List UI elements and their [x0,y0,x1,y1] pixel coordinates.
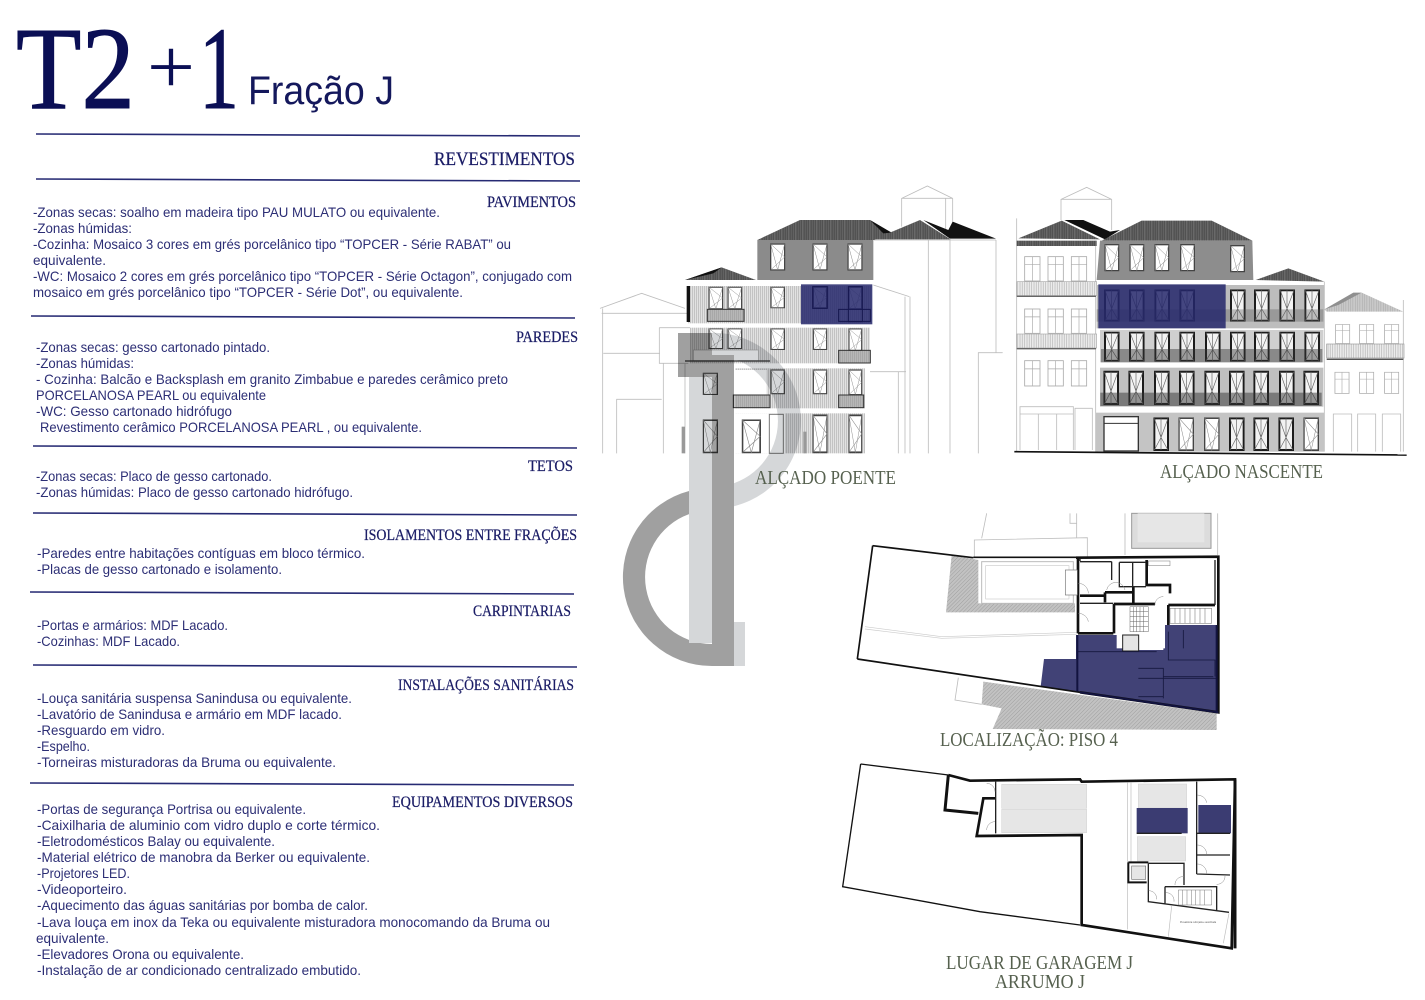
floor plan: garagem e arrumo [843,764,1235,948]
text block: tetos: TETOS [528,458,573,475]
text block: isolamentos entre frações [33,513,577,577]
text block: equipamentos diversos: -Aquecimento das águas sanitárias por bomba de calor. [37,897,368,913]
right building [1327,325,1404,452]
text block: instalações sanitárias: -Resguardo em vidro. [37,722,165,738]
title [16,3,394,134]
elevation drawing: alçado poente [600,186,1003,453]
text block: pavimentos: -Cozinha: Mosaico 3 cores em grés porcelânico tipo “TOPCER - Série RABAT” ou [33,236,511,252]
text block: isolamentos entre frações: -Placas de gesso cartonado e isolamento. [37,561,282,577]
text block: paredes: -Zonas secas: gesso cartonado pintado. [36,339,270,355]
text block: equipamentos diversos: -Projetores LED. [37,865,130,881]
railings [707,309,870,408]
text block: paredes: - Cozinha: Balcão e Backsplash em granito Zimbabue e paredes cerâmico preto [36,371,508,387]
text block: equipamentos diversos: equivalente. [36,930,109,946]
text block: equipamentos diversos: -Lava louça em inox da Teka ou equivalente misturadora monocomando da Bruma ou [37,914,550,930]
text block: carpintarias: -Cozinhas: MDF Lacado. [37,633,180,649]
text block: equipamentos diversos: -Material elétrico de manobra da Berker ou equivalente. [37,849,370,865]
text block: paredes: PORCELANOSA PEARL ou equivalente [36,387,266,403]
text block: tetos [33,446,577,500]
text block: equipamentos diversos [30,783,574,978]
text block: paredes: PAREDES [516,329,578,346]
text block: instalações sanitárias: INSTALAÇÕES SANITÁRIAS [398,677,574,694]
text block: pavimentos: -Zonas secas: soalho em madeira tipo PAU MULATO ou equivalente. [33,204,440,220]
text block: equipamentos diversos: EQUIPAMENTOS DIVERSOS [392,794,573,811]
icon: upper roofs [685,220,996,280]
text block: equipamentos diversos: -Caixilharia de aluminio com vidro duplo e corte térmico. [37,817,380,833]
text block: equipamentos diversos: -Elevadores Orona ou equivalente. [37,946,244,962]
floor plan: garagem e arrumo: Prevalência reforçada e autorizada [1180,921,1217,924]
parking bays [1002,784,1187,861]
text block: instalações sanitárias: -Espelho. [37,738,90,754]
text block: equipamentos diversos: -Eletrodomésticos Balay ou equivalente. [37,833,275,849]
highlight: fração J [1041,625,1218,712]
text block: pavimentos [33,194,576,300]
text block: carpintarias: -Portas e armários: MDF Lacado. [37,617,228,633]
left building [1017,257,1097,450]
text block: isolamentos entre frações: ISOLAMENTOS ENTRE FRAÇÕES [364,527,577,544]
caption: arrumo: ARRUMO J [995,971,1085,993]
highlight: lugar J and arrumo J [1137,805,1231,833]
text block: tetos: -Zonas secas: Placo de gesso cartonado. [36,468,272,484]
text block: isolamentos entre frações: -Paredes entre habitações contíguas em bloco térmico. [37,545,365,561]
watermark logo [623,333,801,666]
caption: lugar de garagem: LUGAR DE GARAGEM J [946,952,1133,974]
text block: paredes: -WC: Gesso cartonado hidrófugo [36,403,232,419]
caption: localização: LOCALIZAÇÃO: PISO 4 [940,727,1118,751]
text block: pavimentos: equivalente. [33,252,106,268]
text block: instalações sanitárias: -Louça sanitária suspensa Sanindusa ou equivalente. [37,690,352,706]
text block: pavimentos: mosaico em grés porcelânico tipo “TOPCER - Série Dot”, ou equivalente. [33,284,463,300]
text block: tetos: -Zonas húmidas: Placo de gesso cartonado hidrófugo. [36,484,353,500]
section heading: revestimentos: REVESTIMENTOS [434,149,575,170]
text block: equipamentos diversos: -Portas de segurança Portrisa ou equivalente. [37,801,306,817]
text block: pavimentos: -Zonas húmidas: [33,220,132,236]
hatched terrace [946,555,1075,612]
floor plan: piso 4 [857,513,1218,730]
main body [1096,285,1324,452]
text block: paredes: -Zonas húmidas: [36,355,134,371]
title: Fração J [248,69,394,113]
text block: carpintarias [30,592,574,649]
text block: equipamentos diversos: -Instalação de ar condicionado centralizado embutido. [37,962,361,978]
caption: alçado nascente: ALÇADO NASCENTE [1160,461,1323,483]
title: 1 [199,3,239,134]
roofs [1017,220,1403,312]
text block: pavimentos: -WC: Mosaico 2 cores em grés porcelânico tipo “TOPCER - Série Octagon”, conjugado com [33,268,572,284]
text block: equipamentos diversos: -Videoporteiro. [37,881,127,897]
interior lines [1077,630,1217,698]
elevation drawing: alçado nascente [1014,187,1407,455]
highlight: fração J [1098,284,1226,328]
highlight: fração J [801,284,872,324]
text block: instalações sanitárias: -Torneiras misturadoras da Bruma ou equivalente. [37,754,336,770]
title: T2 [16,3,135,134]
text block: carpintarias: CARPINTARIAS [473,603,571,620]
text block: instalações sanitárias [33,665,577,770]
text block: paredes: Revestimento cerâmico PORCELANOSA PEARL , ou equivalente. [40,419,422,435]
caption: alçado poente: ALÇADO POENTE [755,467,896,489]
text block: instalações sanitárias: -Lavatório de Sanindusa e armário em MDF lacado. [37,706,342,722]
text block: pavimentos: PAVIMENTOS [487,194,576,211]
title: + [147,23,195,110]
text block: paredes [31,316,578,435]
